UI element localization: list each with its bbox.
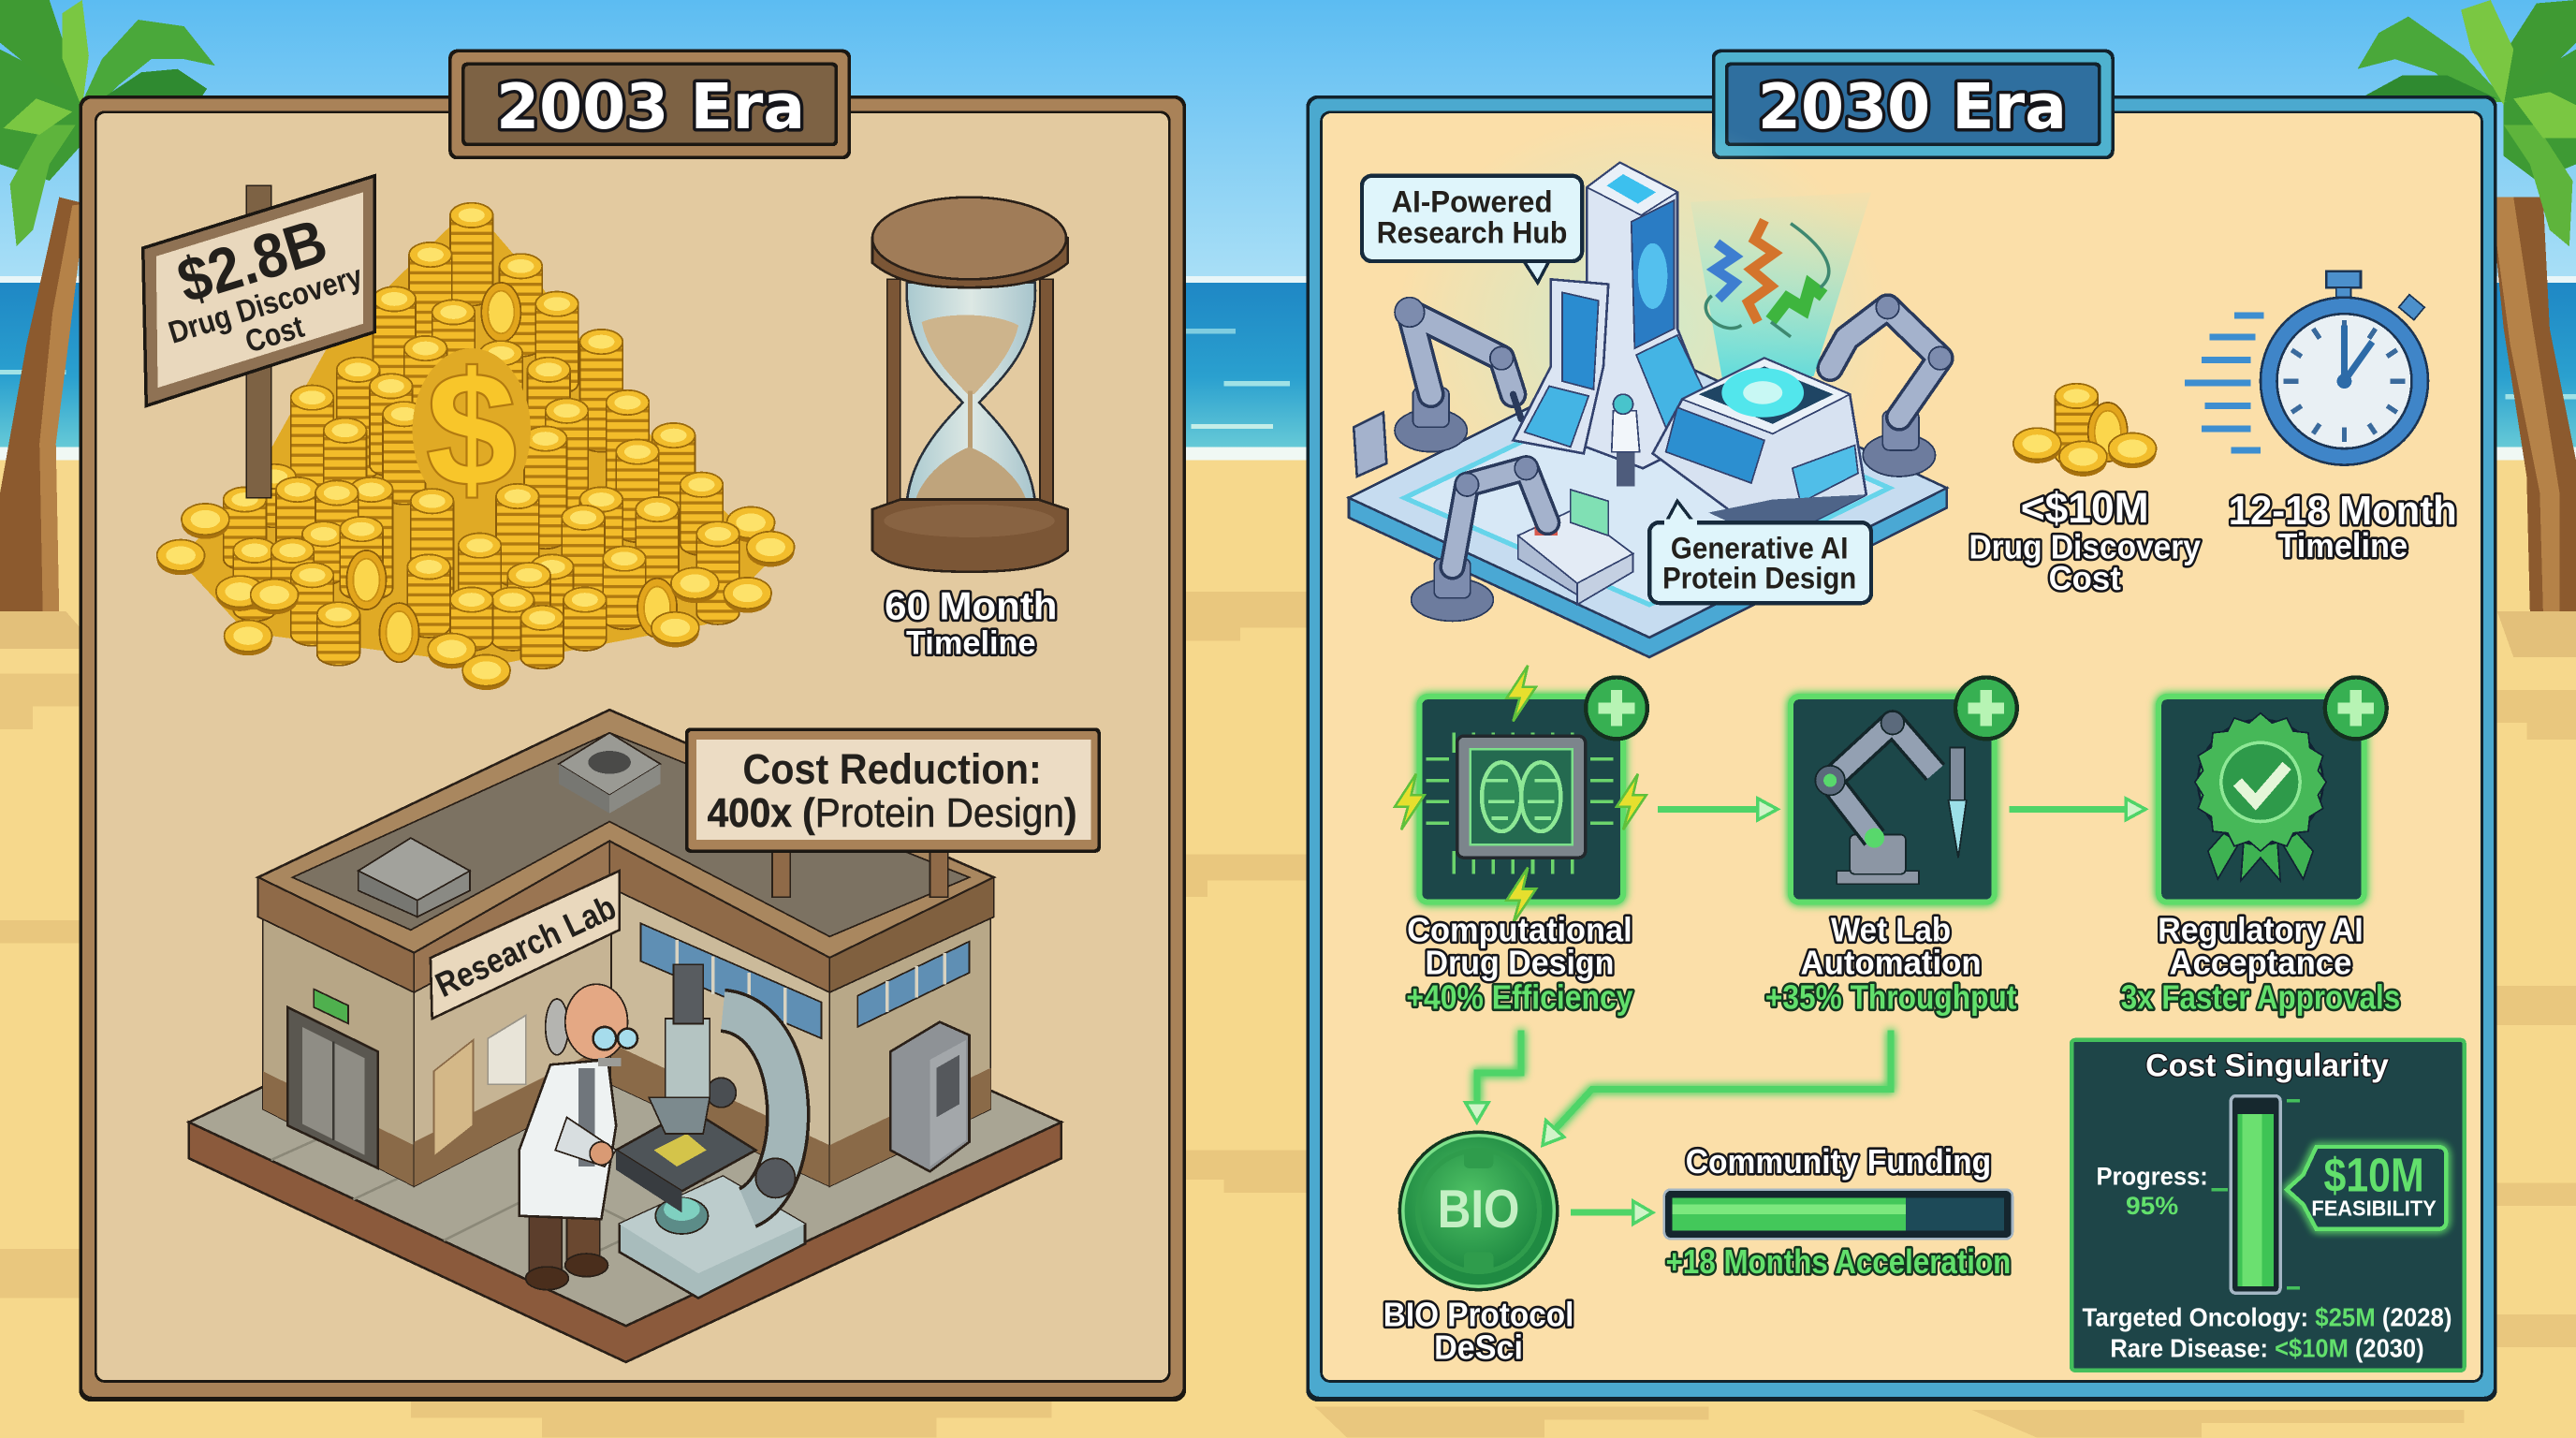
lab desk [1518,490,1633,605]
floor platform [189,920,1061,1362]
signboard: $2.8B drug discovery cost: Drug Discovery [165,259,367,351]
scientist [520,984,637,1290]
icon: hourglass [872,198,1068,572]
rooftop units [359,733,661,917]
community funding progress bar [1664,1142,2012,1281]
label: Acceptance [2170,944,2351,982]
progress label: Progress: [2096,1161,2208,1190]
thermometer gauge [2211,1096,2300,1293]
label: 60 month timeline [885,584,1057,662]
connector: wet lab to BIO [1543,1030,1891,1145]
icon: BIO coin [1398,1130,1559,1291]
milestones text: Targeted Oncology: $25M (2028) [2083,1302,2452,1331]
panel: 2030 era [1306,50,2497,1401]
wall posters [433,1016,526,1157]
sand [0,460,2576,1438]
milestones text [2083,1302,2452,1363]
title plaque: 2030 Era [1712,50,2115,159]
front tower [1513,279,1608,453]
big dollar sign: $ [427,340,517,520]
label: +35% Throughput [1765,978,2016,1017]
arrow: wet lab to regulatory [2009,799,2145,820]
label: 12-18 month timeline [2229,488,2457,565]
heading: Cost Singularity [2145,1049,2389,1084]
label: Drug Design [1426,944,1614,982]
panel frame [79,95,1186,1401]
sign: research lab: Research Lab [430,888,622,1005]
technician [1612,394,1640,486]
arrow: BIO to funding [1571,1201,1653,1224]
label: +40% Efficiency [1406,978,1633,1017]
sea [0,278,2576,459]
walls [263,888,990,1186]
robot arm: front [1412,457,1547,621]
connector: design to BIO [1466,1030,1521,1123]
card: computational drug design [1395,666,1649,1017]
title plaque: 2003 Era: 2003 Era [496,70,805,143]
callout: AI-powered research hub [1362,176,1582,283]
signboard: $2.8B drug discovery cost [143,176,376,498]
panel frame [1306,95,2497,1401]
label: Computational [1407,911,1632,949]
callout: generative AI protein design [1649,501,1871,603]
icon: BIO coin: BIO [1438,1180,1519,1240]
callout: AI-powered research hub: AI-Powered [1392,184,1553,218]
server cabinet [890,1022,970,1171]
milestones text: Rare Disease: <$10M (2030) [2110,1334,2424,1363]
signboard: $2.8B drug discovery cost: Cost [242,310,308,360]
label: <$10M drug discovery cost [1969,484,2201,597]
title plaque: 2030 Era: 2030 Era [1758,70,2067,143]
callout: $10M feasibility: FEASIBILITY [2311,1196,2437,1221]
signboard: $2.8B drug discovery cost: $2.8B [170,207,335,317]
callout: $10M feasibility [2287,1147,2446,1229]
label [1765,911,2016,1017]
console with holo emitter [1653,359,1866,542]
sky [0,0,2576,279]
label [2121,911,2400,1017]
label: BIO protocol DeSci: BIO Protocol [1383,1295,1573,1333]
label: 12-18 month timeline: 12-18 Month [2229,488,2457,534]
label: 60 month timeline: 60 Month [885,584,1057,628]
small robot unit [1354,413,1386,477]
palm tree right [2358,0,2576,657]
robot arm: back right [1830,296,1952,477]
research lab building [189,710,1101,1362]
label: BIO protocol DeSci: DeSci [1434,1328,1523,1366]
panel: 2003 era [79,50,1186,1401]
card: regulatory AI acceptance [2121,675,2400,1017]
label: BIO protocol DeSci [1383,1295,1573,1366]
sign: cost reduction: Cost Reduction: [742,745,1042,793]
label: <$10M drug discovery cost: <$10M [2021,484,2149,532]
icon: approval rosette [2159,675,2389,902]
platform [1349,348,1947,657]
icon: brain chip [1395,666,1649,923]
callout: generative AI protein design: Generative AI [1671,532,1848,565]
panel: cost singularity [2071,1040,2465,1371]
label: <$10M drug discovery cost: Drug Discovery [1969,528,2201,566]
hologram beam [1690,192,1871,385]
label: 60 month timeline: Timeline [906,625,1036,662]
label: Regulatory AI [2158,911,2364,949]
label: Wet Lab [1831,911,1951,949]
icon: stopwatch [2185,271,2428,465]
title plaque: 2003 Era [448,50,851,159]
label [1406,911,1633,1017]
callout: $10M feasibility: $10M [2324,1148,2424,1201]
label: 3x Faster Approvals [2121,978,2400,1017]
robot arm: back left [1395,298,1521,452]
palm tree left [0,0,215,649]
progress label [2096,1161,2208,1220]
label: <$10M drug discovery cost: Cost [2049,559,2121,597]
arrow: design to wet lab [1658,799,1778,820]
microscope [616,964,805,1298]
callout: AI-powered research hub: Research Hub [1377,216,1567,250]
door and exit sign [287,990,378,1168]
icon: small coin pile [2013,384,2157,477]
label: 12-18 month timeline: Timeline [2277,526,2408,565]
coin pile [157,203,795,690]
label: Automation [1801,944,1982,982]
AI research hub illustration [1349,115,1952,657]
protein structure [1705,220,1829,337]
icon: robot arm with pipette [1791,675,2019,902]
callout: generative AI protein design: Protein Design [1662,561,1856,594]
community funding progress bar: +18 Months Acceleration [1666,1242,2011,1281]
sign: cost reduction: 400x (Protein Design) [708,790,1076,836]
community funding progress bar: Community Funding [1686,1142,1991,1181]
sign: cost reduction [685,727,1101,897]
tall tower [1577,163,1719,468]
card: wet lab automation [1765,675,2019,1017]
progress label: 95% [2126,1191,2178,1220]
windows [641,923,970,1038]
roof [258,710,994,992]
